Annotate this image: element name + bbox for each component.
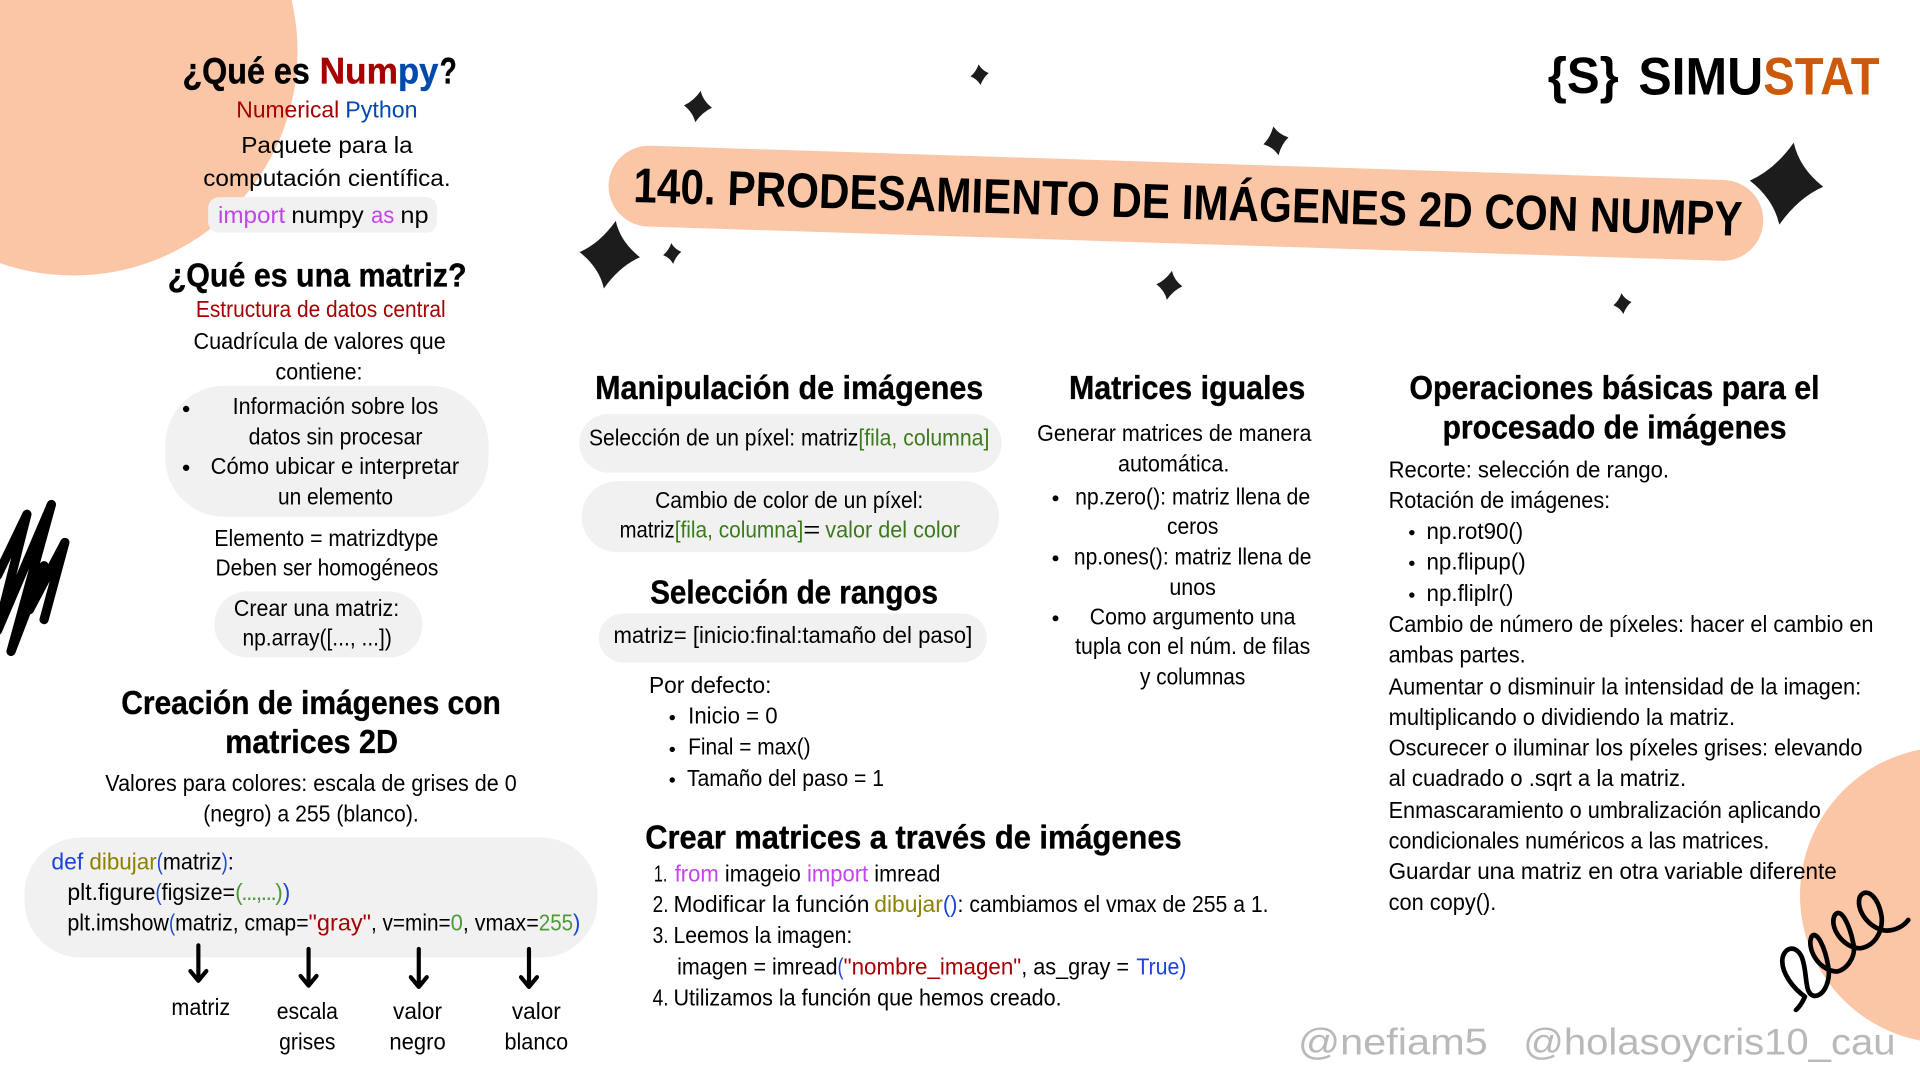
heading: Crear matrices a través de imágenes xyxy=(645,820,1182,857)
arrow labels: valor xyxy=(393,998,442,1024)
step 1: from xyxy=(675,861,719,887)
arrow labels: grises xyxy=(279,1028,336,1054)
code block: "gray" xyxy=(309,910,371,936)
subtitle: Estructura de datos central xyxy=(196,296,446,322)
text: recorte y rotación: Rotación de imágenes: xyxy=(1389,487,1610,513)
description: automática. xyxy=(1118,450,1229,476)
heading xyxy=(182,50,457,91)
panel: ¿Qué es una matriz? xyxy=(165,258,489,658)
heading: ? xyxy=(440,50,457,91)
subtitle: Python xyxy=(345,97,418,123)
description xyxy=(1037,420,1312,476)
arrow labels: valor xyxy=(512,998,561,1024)
code pill: np.array: Crear una matriz: xyxy=(234,595,399,621)
description: Cuadrícula de valores que xyxy=(193,328,446,354)
arrow labels xyxy=(171,994,568,1054)
code pill: import: as xyxy=(371,202,394,228)
pixel colour change pill: = xyxy=(803,517,820,543)
pixel selection pill: [fila, columna] xyxy=(858,425,989,451)
text: recorte y rotación: np.flipup() xyxy=(1427,548,1526,574)
code block: 0 xyxy=(451,910,463,936)
list: y columnas xyxy=(1140,663,1245,689)
arrow labels: matriz xyxy=(171,994,230,1020)
range syntax pill: matriz= [inicio:final:tamaño del paso] xyxy=(613,622,972,648)
code pill: import: import xyxy=(218,202,286,228)
pixel colour change pill: [fila, columna] xyxy=(675,517,803,543)
defaults list: Final = max() xyxy=(688,733,811,759)
logo: SIMUSTAT: STAT xyxy=(1763,47,1880,106)
title: 140. PRODESAMIENTO DE IMÁGENES 2D CON NUMPY xyxy=(633,159,1743,247)
code pill: np.array: np.array([..., ...]) xyxy=(242,624,392,650)
code block: ( xyxy=(157,848,163,874)
step 1: imread xyxy=(874,861,940,887)
description: Generar matrices de manera xyxy=(1037,420,1312,446)
scribble: left edge xyxy=(0,504,65,651)
step 3: "nombre_imagen" xyxy=(844,954,1021,980)
description xyxy=(193,328,446,385)
footer: author handles xyxy=(1298,1021,1896,1062)
description xyxy=(203,132,451,191)
step 2: Modificar la función xyxy=(673,891,869,917)
text: recorte y rotación: np.rot90() xyxy=(1427,518,1523,544)
sparkle stars xyxy=(574,64,1830,315)
step 3: ( xyxy=(838,954,844,980)
arrow labels: negro xyxy=(389,1028,446,1054)
step 3: imagen = imread xyxy=(677,954,838,980)
heading: ¿Qué es xyxy=(182,50,310,91)
element note xyxy=(214,525,438,581)
step 3: Leemos la imagen: xyxy=(673,922,852,948)
step 1 xyxy=(654,861,940,887)
heading: procesado de imágenes xyxy=(1442,409,1787,446)
text: operaciones xyxy=(1389,611,1873,915)
panel: ¿Qué es Numpy? xyxy=(182,50,457,233)
list pill: un elemento xyxy=(278,483,393,509)
pixel colour change pill: matriz xyxy=(620,517,675,543)
defaults list: Inicio = 0 xyxy=(688,703,778,729)
step 2 xyxy=(653,891,1269,917)
list: np.zero(): matriz llena de xyxy=(1075,483,1310,509)
code block xyxy=(24,838,598,958)
step 3: , as_gray = xyxy=(1021,954,1129,980)
code block: plt.figure xyxy=(67,879,156,905)
code pill: np.array xyxy=(214,591,422,658)
pixel colour change pill: valor del color xyxy=(825,517,960,543)
arrows xyxy=(190,945,537,987)
heading xyxy=(121,685,501,761)
spiral doodle: bottom right xyxy=(1782,893,1908,1010)
heading: Creación de imágenes con xyxy=(121,685,501,722)
description: (negro) a 255 (blanco). xyxy=(203,801,419,827)
list pill: datos sin procesar xyxy=(249,423,423,449)
defaults list xyxy=(649,672,884,791)
text: recorte y rotación xyxy=(1389,457,1669,606)
footer: author handles: @nefiam5 xyxy=(1298,1021,1488,1062)
code block: figsize= xyxy=(162,879,235,905)
heading: py xyxy=(398,50,439,91)
code block: , vmax= xyxy=(463,910,539,936)
text: operaciones: Cambio de número de píxeles: hacer el cambio en xyxy=(1389,611,1873,637)
description xyxy=(105,770,517,827)
step 2: dibujar xyxy=(874,891,943,917)
code block: ) xyxy=(222,848,228,874)
code block: plt.imshow xyxy=(67,910,170,936)
description: contiene: xyxy=(276,359,362,385)
element note: Elemento = matrizdtype xyxy=(214,525,438,551)
text: operaciones: Enmascaramiento o umbralización aplicando xyxy=(1389,797,1821,823)
footer: author handles: @holasoycris10_cau xyxy=(1523,1021,1896,1062)
step 4: Utilizamos la función que hemos creado. xyxy=(673,984,1062,1010)
pixel selection pill xyxy=(579,414,1002,473)
text: operaciones: multiplicando o dividiendo la matriz. xyxy=(1389,704,1735,730)
panel: Operaciones básicas xyxy=(1389,370,1873,915)
list: tupla con el núm. de filas xyxy=(1075,633,1310,659)
step 1: 1. xyxy=(654,861,667,887)
decorative circle: bottom right xyxy=(1800,747,1920,1043)
panel: Creación de imágenes con matrices 2D xyxy=(24,685,598,1054)
pixel selection pill: Selección de un píxel: matriz xyxy=(589,425,858,451)
text: operaciones: Oscurecer o iluminar los píxeles grises: elevando xyxy=(1389,735,1862,761)
text: operaciones: Aumentar o disminuir la intensidad de la imagen: xyxy=(1389,673,1861,699)
banner shape xyxy=(649,186,1723,220)
step 3: True) xyxy=(1136,954,1187,980)
code block: matriz xyxy=(163,848,222,874)
step 2: 2. xyxy=(653,891,669,917)
subtitle xyxy=(236,97,418,123)
code block: matriz, cmap= xyxy=(175,910,309,936)
heading xyxy=(1409,370,1820,446)
heading: Matrices iguales xyxy=(1069,370,1305,407)
subtitle: Numerical xyxy=(236,97,339,123)
panel: banner title xyxy=(633,159,1743,247)
heading: ¿Qué es una matriz? xyxy=(168,258,467,295)
code block: , v=min= xyxy=(371,910,451,936)
heading: Selección de rangos xyxy=(650,575,938,612)
code block: ( xyxy=(156,879,162,905)
list: unos xyxy=(1169,574,1216,600)
description: computación científica. xyxy=(203,165,451,191)
text: recorte y rotación: np.fliplr() xyxy=(1427,580,1513,606)
code block: ( xyxy=(169,910,175,936)
arrow labels: escala xyxy=(277,998,338,1024)
text: recorte y rotación: Recorte: selección de rango. xyxy=(1389,457,1669,483)
heading: Operaciones básicas para el xyxy=(1409,370,1820,407)
step 1: imageio xyxy=(725,861,801,887)
code block: 255 xyxy=(539,910,573,936)
panel: Crear matrices a través de imágenes xyxy=(645,820,1269,1010)
pixel colour change pill xyxy=(582,481,999,552)
heading: matrices 2D xyxy=(225,724,398,761)
code pill: import xyxy=(208,197,437,233)
step 4: 4. xyxy=(653,984,669,1010)
text: operaciones: al cuadrado o .sqrt a la matriz. xyxy=(1389,765,1686,791)
decorative circle: top left xyxy=(0,0,298,276)
code block: ) xyxy=(573,910,580,936)
list: ceros xyxy=(1167,513,1218,539)
step 3: 3. xyxy=(653,922,669,948)
step 3 xyxy=(653,922,1187,980)
description: Valores para colores: escala de grises de 0 xyxy=(105,770,517,796)
description: Paquete para la xyxy=(241,132,413,158)
text: operaciones: Guardar una matriz en otra variable diferente xyxy=(1389,858,1837,884)
list: np.ones(): matriz llena de xyxy=(1074,543,1311,569)
panel: Selección de rangos xyxy=(599,575,987,791)
code pill: import: numpy xyxy=(291,202,364,228)
step 2: () xyxy=(943,891,958,917)
panel: Matrices iguales xyxy=(1037,370,1312,689)
range syntax pill xyxy=(599,613,987,662)
heading: Manipulación de imágenes xyxy=(595,370,983,407)
logo: SIMUSTAT: SIMU xyxy=(1638,47,1763,106)
text: operaciones: condicionales numéricos a las matrices. xyxy=(1389,828,1769,854)
code block: def xyxy=(51,848,84,874)
code block: (...,...) xyxy=(235,879,283,905)
arrow labels: blanco xyxy=(504,1028,568,1054)
panel: Manipulación de imágenes xyxy=(579,370,1002,552)
list pill: Información sobre los xyxy=(233,393,438,419)
list: Como argumento una xyxy=(1090,603,1296,629)
list xyxy=(1053,483,1311,689)
code block: : xyxy=(228,848,234,874)
text: operaciones: ambas partes. xyxy=(1389,641,1526,667)
code pill: import: np xyxy=(400,202,429,228)
list pill: Cómo ubicar e interpretar xyxy=(211,453,460,479)
defaults list: Tamaño del paso = 1 xyxy=(687,765,884,791)
text: operaciones: con copy(). xyxy=(1389,889,1496,915)
code block: ) xyxy=(283,879,290,905)
defaults list: Por defecto: xyxy=(649,672,771,698)
logo: SIMUSTAT: {S} xyxy=(1548,46,1619,104)
step 1: import xyxy=(807,861,869,887)
element note: Deben ser homogéneos xyxy=(216,555,438,581)
logo: SIMUSTAT xyxy=(1548,46,1880,106)
step 2: : cambiamos el vmax de 255 a 1. xyxy=(958,891,1269,917)
list pill xyxy=(165,386,489,517)
code block: dibujar xyxy=(89,848,157,874)
pixel colour change pill: Cambio de color de un píxel: xyxy=(655,487,923,513)
heading: Num xyxy=(320,50,398,91)
